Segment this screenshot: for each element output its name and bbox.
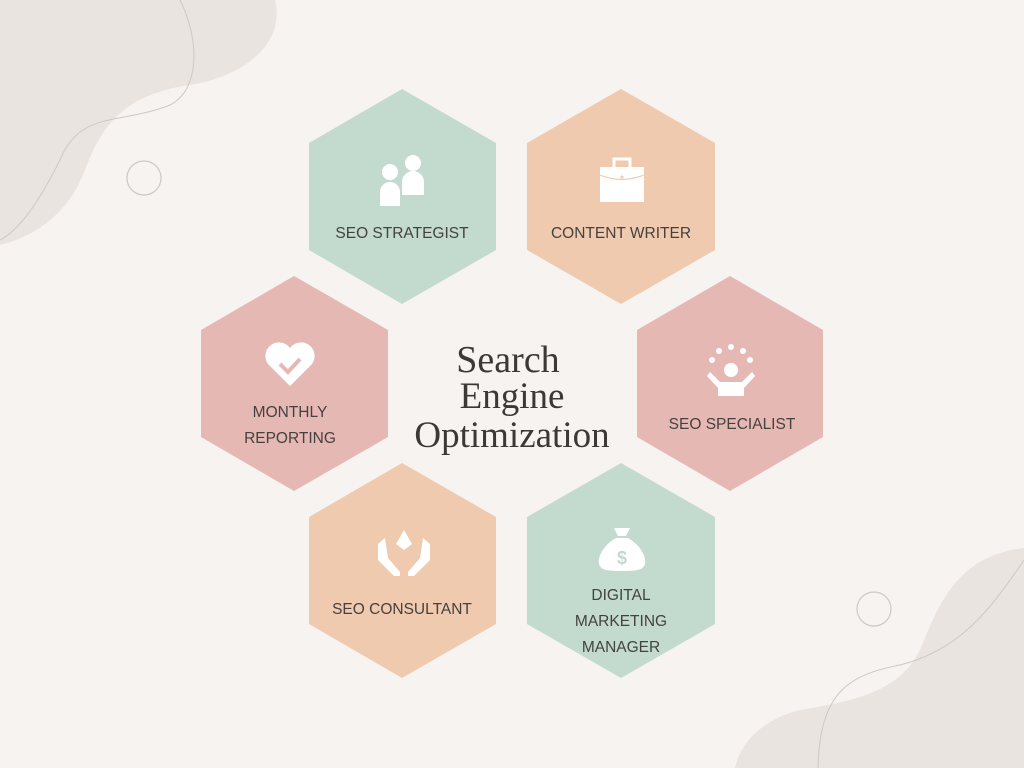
- decorative circle top-left: [127, 161, 161, 195]
- background blob top-left: [0, 0, 277, 245]
- icon: hands: [378, 530, 430, 576]
- icon: people: [380, 155, 424, 206]
- icon: money bag: [599, 528, 645, 571]
- icon: juggling person: [707, 344, 755, 396]
- title: Search: [456, 339, 560, 381]
- hex: Digital Marketing Manager: [527, 463, 715, 678]
- hex: Monthly Reporting: [201, 276, 388, 491]
- hex: SEO Strategist: SEO STRATEGIST: [335, 225, 469, 242]
- hex: Digital Marketing Manager: MANAGER: [582, 639, 660, 656]
- hex: Content Writer: [527, 89, 715, 304]
- hex: SEO Specialist: SEO SPECIALIST: [669, 416, 796, 433]
- hex: Content Writer: CONTENT WRITER: [551, 225, 691, 242]
- hex: Monthly Reporting: REPORTING: [244, 430, 336, 447]
- icon: briefcase: [600, 159, 644, 202]
- icon: money bag: $: [617, 548, 627, 568]
- background blob bottom-right: [735, 548, 1024, 768]
- title: Engine: [460, 376, 564, 417]
- hex: SEO Consultant: [309, 463, 496, 678]
- decorative circle bottom-right: [857, 592, 891, 626]
- hex: SEO Strategist: [309, 89, 496, 304]
- icon: heart check: [265, 342, 315, 386]
- title: Optimization: [414, 415, 610, 456]
- hex: Digital Marketing Manager: DIGITAL: [591, 587, 651, 604]
- hex: SEO Specialist: [637, 276, 823, 491]
- hex: Digital Marketing Manager: MARKETING: [575, 613, 667, 630]
- hex: Monthly Reporting: MONTHLY: [253, 404, 327, 421]
- hex: SEO Consultant: SEO CONSULTANT: [332, 601, 472, 618]
- title: [414, 339, 610, 456]
